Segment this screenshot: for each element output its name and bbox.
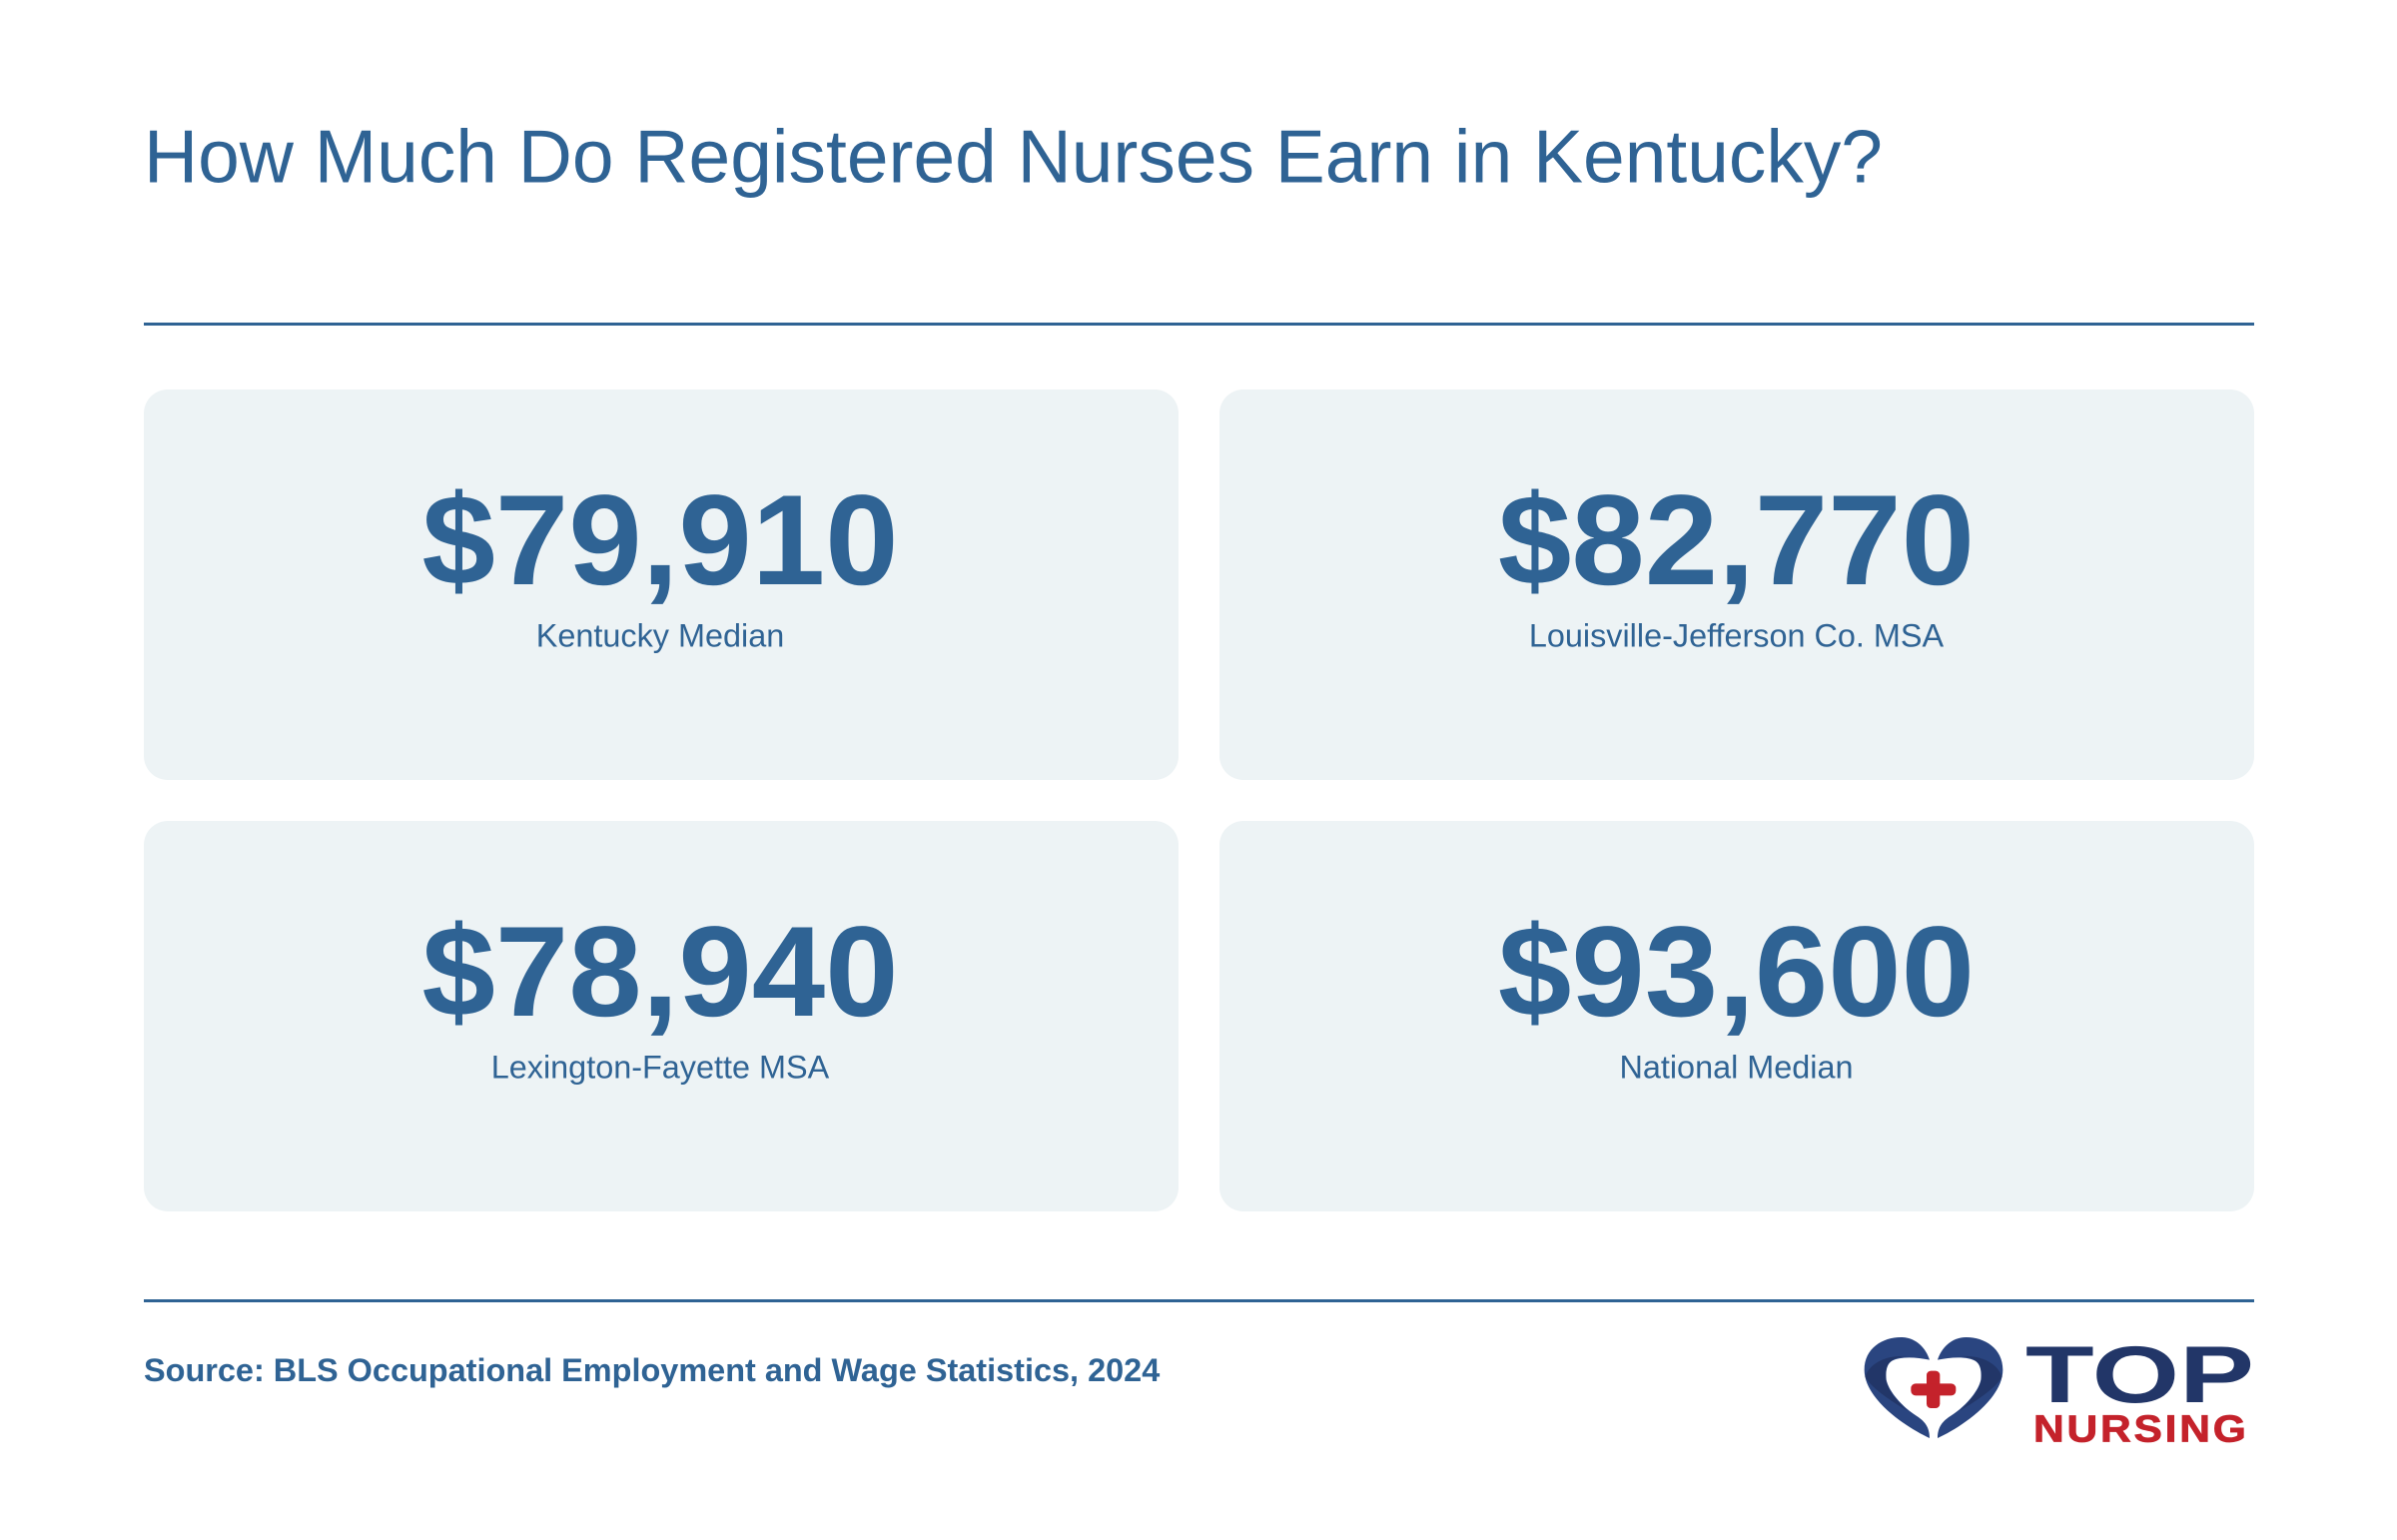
label: Louisville-Jefferson Co. MSA: Louisville-Jefferson Co. MSA — [1529, 617, 1945, 653]
value: Louisville-Jefferson Co. MSA: $82,770 — [1498, 468, 1975, 612]
panel: Lexington-Fayette MSA — [144, 821, 1179, 1211]
panel: Louisville-Jefferson Co. MSA — [1219, 389, 2254, 780]
source text: Source: BLS Occupational Employment and Wage Statistics, 2024 — [144, 1352, 1160, 1388]
label: Lexington-Fayette MSA: Lexington-Fayette MSA — [491, 1049, 830, 1085]
label: National Median: National Median — [1619, 1049, 1854, 1085]
value: Lexington-Fayette MSA: $78,940 — [421, 900, 899, 1044]
panel: Kentucky Median — [144, 389, 1179, 780]
panel: National Median — [1219, 821, 2254, 1211]
title: How Much Do Registered Nurses Earn in Kentucky? — [144, 114, 1883, 198]
wordmark: TOP: TOP — [2025, 1330, 2254, 1420]
value: National Median: $93,600 — [1498, 900, 1975, 1044]
wordmark: NURSING: NURSING — [2033, 1407, 2246, 1450]
icon: heart with cross — [1865, 1337, 2002, 1438]
label: Kentucky Median: Kentucky Median — [536, 617, 784, 653]
logo: Top Nursing — [1865, 1330, 2254, 1450]
value: Kentucky Median: $79,910 — [421, 468, 899, 612]
